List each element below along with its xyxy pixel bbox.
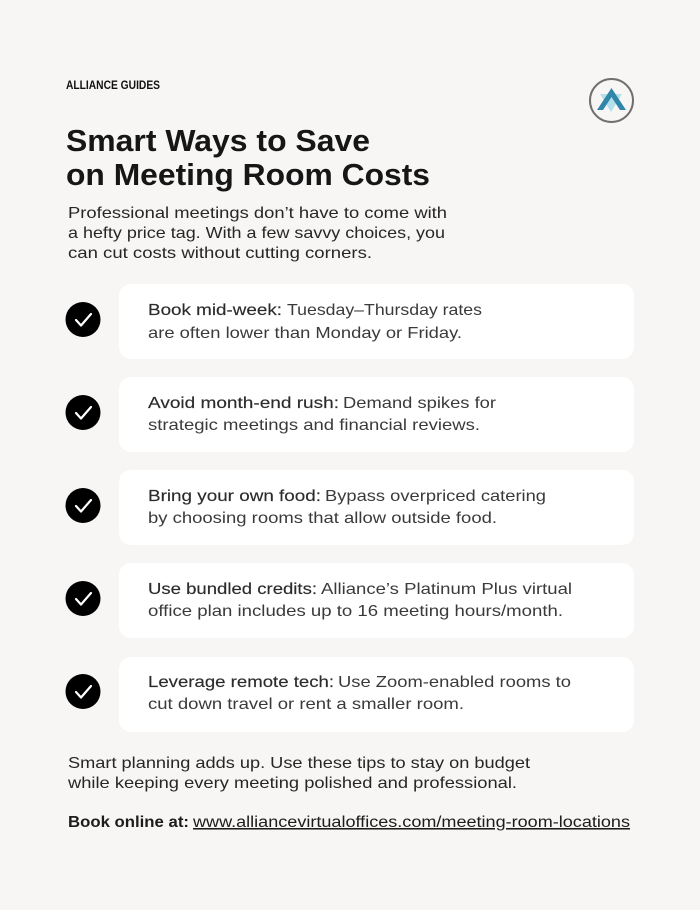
icon: Alliance logo <box>590 79 633 122</box>
card 5 text: Use Zoom-enabled rooms to <box>338 674 571 691</box>
intro paragraph <box>68 205 447 262</box>
intro paragraph: a hefty price tag. With a few savvy choices, you <box>68 225 445 242</box>
icon: check badge 4 <box>66 581 100 616</box>
intro paragraph: Professional meetings don’t have to come with <box>68 205 447 222</box>
card 5 <box>119 657 634 732</box>
card 4 text <box>148 581 572 620</box>
booking link: www.alliancevirtualoffices.com/meeting-room-locations <box>192 814 630 831</box>
tip 4: use bundled credits <box>66 563 634 638</box>
card 3 text: by choosing rooms that allow outside food. <box>148 510 497 527</box>
card 3 <box>119 470 634 545</box>
title <box>66 123 430 192</box>
icon: check badge 3 <box>66 488 100 523</box>
card 2 text: strategic meetings and financial reviews. <box>148 417 480 434</box>
card 3 text <box>148 488 546 527</box>
card 1 text: are often lower than Monday or Friday. <box>148 325 462 342</box>
closing text: Smart planning adds up. Use these tips to stay on budget <box>68 755 531 772</box>
card 2 <box>119 377 634 452</box>
tip 3: bring your own food <box>66 470 634 545</box>
card 5 text: cut down travel or rent a smaller room. <box>148 696 464 713</box>
card 2 text: Demand spikes for <box>343 395 497 412</box>
icon: check badge 1 <box>66 302 100 337</box>
card 4 text: Alliance’s Platinum Plus virtual <box>321 581 572 598</box>
booking link <box>68 814 630 831</box>
tip 1: book mid-week <box>66 284 634 359</box>
title: on Meeting Room Costs <box>66 157 430 192</box>
card 1 text: Tuesday–Thursday rates <box>287 302 482 319</box>
card 1 <box>119 284 634 359</box>
card 2 text <box>148 395 497 434</box>
booking link: Book online at: <box>68 814 189 831</box>
card 4 text: office plan includes up to 16 meeting hours/month. <box>148 603 563 620</box>
card 3 text: Bring your own food: <box>148 488 321 505</box>
card 4 text: Use bundled credits: <box>148 581 317 598</box>
closing text: while keeping every meeting polished and professional. <box>67 775 517 792</box>
closing text <box>67 755 531 792</box>
title: Smart Ways to Save <box>66 123 370 158</box>
card 5 text: Leverage remote tech: <box>148 674 334 691</box>
icon: check badge 2 <box>66 395 100 430</box>
icon: check badge 5 <box>66 674 100 709</box>
card 3 text: Bypass overpriced catering <box>325 488 546 505</box>
card 2 text: Avoid month-end rush: <box>148 395 339 412</box>
tip 5: leverage remote tech <box>66 657 634 732</box>
brand label: ALLIANCE GUIDES <box>66 80 160 92</box>
card 5 text <box>148 674 571 713</box>
intro paragraph: can cut costs without cutting corners. <box>68 245 372 262</box>
card 1 text: Book mid-week: <box>148 302 282 319</box>
tip 2: avoid month-end rush <box>66 377 634 452</box>
card 4 <box>119 563 634 638</box>
card 1 text <box>148 302 482 342</box>
